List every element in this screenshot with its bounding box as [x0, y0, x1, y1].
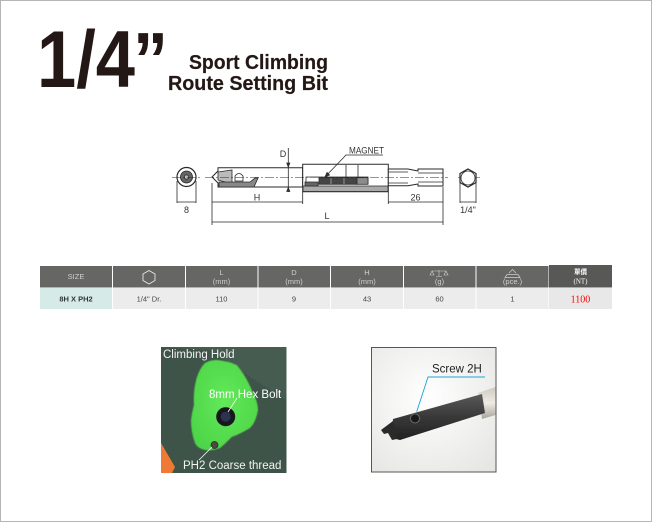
magnet: [319, 178, 368, 184]
table header: L: [219, 268, 224, 277]
table row: 43: [363, 294, 371, 304]
subtitle: Route Setting Bit: [168, 73, 328, 95]
icon: scale: [430, 270, 448, 276]
title: 1/4 inch: ”: [133, 16, 168, 104]
table header: (g): [435, 277, 445, 286]
table header: (mm): [213, 277, 231, 286]
set screw: [410, 414, 420, 423]
table header: 單價: [574, 267, 588, 276]
black bit body: [392, 394, 485, 440]
table row: 110: [216, 294, 227, 304]
icon: package: [505, 270, 520, 278]
blue leader: [417, 377, 485, 412]
photo labels: Climbing Hold: [163, 349, 235, 361]
photo labels: [163, 349, 282, 472]
end view: quarter inch hex: 1/4": [460, 205, 476, 215]
26 dimension: [388, 187, 443, 225]
table row: [40, 288, 612, 309]
table row: 9: [292, 294, 296, 304]
photo: bit with set screw: [372, 348, 496, 472]
photo labels: 8mm Hex Bolt: [209, 389, 282, 401]
silver sleeve: [478, 387, 496, 419]
table header: D: [291, 268, 297, 277]
hex shank: [388, 169, 443, 186]
spec table: [40, 265, 612, 309]
green hold: [191, 360, 258, 450]
technical diagram: [172, 146, 480, 225]
H dimension: H: [254, 192, 260, 202]
bit side view: [212, 164, 388, 192]
table row: 1: [510, 294, 515, 304]
small screw: [211, 442, 218, 448]
title: 1/4 inch: 1/4: [37, 15, 135, 105]
table header: [40, 265, 612, 288]
table header: (mm): [285, 277, 303, 286]
end view: quarter inch hex: [460, 169, 476, 215]
magnet callout: [325, 146, 384, 177]
H dimension: [212, 183, 303, 225]
photo: climbing hold: [161, 347, 286, 473]
26 dimension: 26: [410, 192, 421, 202]
end view: 8mm hex socket: [177, 168, 196, 215]
table header: (pce.): [503, 277, 523, 286]
bit tip: [381, 421, 397, 440]
bolt leader: [228, 398, 237, 412]
table header: H: [364, 268, 370, 277]
table header: (mm): [358, 277, 376, 286]
table row: 1100: [571, 294, 590, 306]
hex bolt: [216, 407, 235, 426]
D dimension: [280, 148, 290, 192]
table row: 1/4" Dr.: [137, 294, 161, 304]
end view: 8mm hex socket: 8: [184, 205, 189, 215]
table row: 60: [435, 294, 444, 304]
magnet callout: MAGNET: [349, 146, 384, 156]
subtitle: Sport Climbing: [189, 52, 328, 74]
subtitle: [168, 52, 328, 95]
icon: hexagon: [143, 270, 155, 284]
table row: 8H X PH2: [59, 294, 93, 304]
L dimension: L: [324, 211, 330, 221]
table header: (NT): [574, 278, 588, 286]
photo labels: PH2 Coarse thread: [183, 460, 281, 472]
orange hold fragment: [161, 443, 175, 473]
screw label: Screw 2H: [432, 364, 482, 376]
D dimension: D: [280, 149, 287, 159]
screw leader: [199, 447, 212, 460]
center line: [172, 176, 480, 178]
table header: SIZE: [68, 272, 84, 281]
